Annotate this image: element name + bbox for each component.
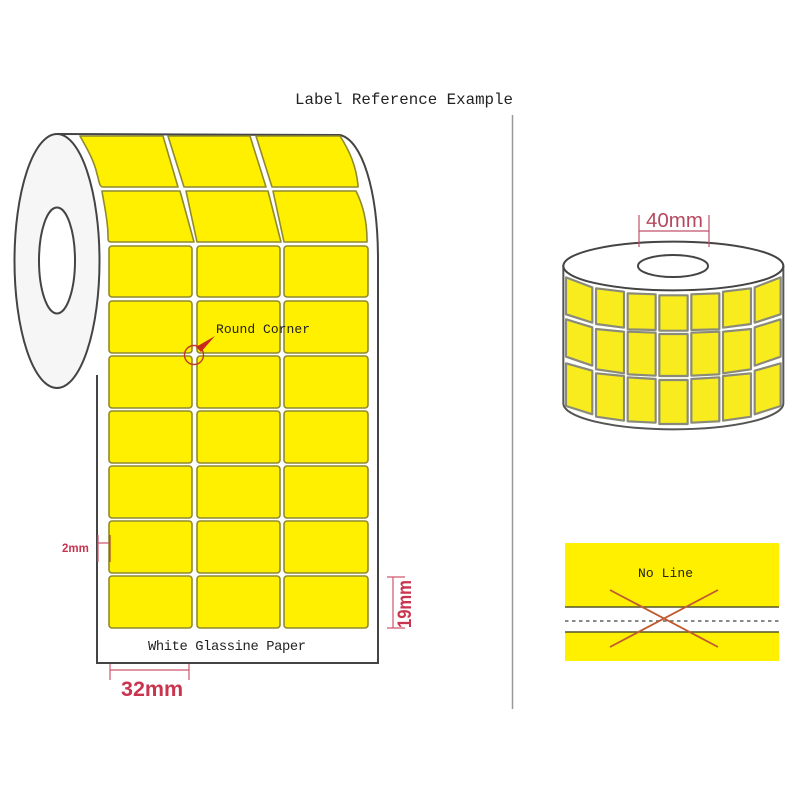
panel: no line example [565, 543, 779, 661]
dimension: 32mm width: 32mm [121, 677, 183, 701]
curved labels top rows [80, 136, 367, 242]
dimension: 40mm width: 40mm [646, 209, 703, 232]
cross mark [610, 590, 718, 647]
caption: No Line [638, 566, 693, 581]
panel: small label roll [563, 242, 783, 429]
gap border lines [565, 607, 779, 632]
dimension: 2mm gap [62, 535, 110, 562]
white gap [565, 607, 779, 632]
roll core hole [638, 255, 708, 277]
roll body outline [57, 134, 378, 663]
round corner callout: Round Corner [216, 322, 310, 337]
dimension: 19mm height: 19mm [394, 580, 415, 628]
roll top face [563, 242, 783, 290]
title: Label Reference Example [295, 91, 513, 109]
roll core hole [39, 208, 75, 314]
backing paper caption: White Glassine Paper [148, 639, 306, 655]
roll end disc [14, 134, 100, 388]
yellow label strip [565, 543, 779, 661]
label columns [566, 277, 781, 424]
divider [512, 115, 514, 709]
dashed line [565, 620, 779, 622]
panel: large label roll [14, 134, 415, 701]
dimension: 40mm width [639, 209, 709, 247]
round corner callout [184, 322, 310, 364]
roll side [563, 266, 783, 429]
dimension: 2mm gap: 2mm [62, 543, 89, 555]
dimension: 32mm width [110, 664, 189, 701]
flat labels grid [109, 246, 368, 628]
